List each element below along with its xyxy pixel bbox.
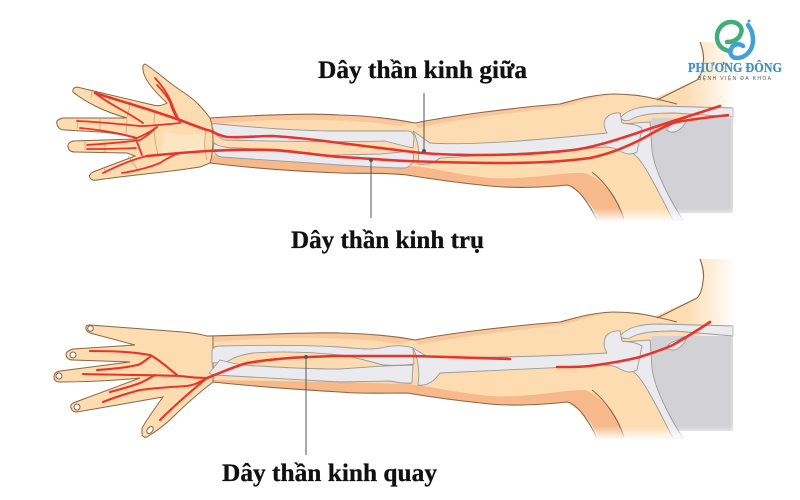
- white bottom fade, bottom arm: [590, 426, 740, 440]
- leader line: ulnar nerve: [369, 158, 373, 218]
- leader line: median nerve: [422, 93, 426, 153]
- ulna and radius, top: [212, 124, 414, 148]
- arm skin, bottom: [213, 312, 700, 440]
- bottom arm: radial nerve: [54, 259, 740, 440]
- radial nerve main, bottom: [207, 322, 710, 378]
- grey chest panel, top: [648, 118, 733, 213]
- hand, top: [57, 64, 213, 180]
- arm skin, top: [210, 94, 700, 222]
- ulna and radius, bottom: [212, 345, 414, 365]
- collarbone and scapula, bottom: [620, 324, 733, 339]
- label: radial nerve: Dây thần kinh quay: [222, 460, 438, 487]
- hand nerve branches, top: [77, 78, 180, 173]
- leader line: radial nerve: [304, 355, 308, 455]
- right fade, top arm: [730, 95, 740, 220]
- torso and neck, bottom: [650, 259, 740, 343]
- hand creases, top: [77, 91, 207, 174]
- hand, bottom: [54, 325, 213, 437]
- humerus, bottom: [413, 331, 642, 385]
- logo name: PHƯƠNG ĐÔNG: [688, 59, 782, 76]
- logo mark: [717, 20, 753, 58]
- palm shading, top: [160, 131, 205, 159]
- median nerve, top: [95, 93, 728, 163]
- label: ulnar nerve: Dây thần kinh trụ: [291, 227, 484, 254]
- radial nerve branches, bottom: [83, 351, 207, 420]
- torso and neck, top: [650, 42, 740, 125]
- grey chest panel, bottom: [648, 336, 733, 431]
- white bottom fade, top arm: [590, 208, 740, 222]
- collarbone and scapula, top: [620, 106, 733, 121]
- arm outline, top: [210, 42, 704, 220]
- arm outline, bottom: [207, 259, 704, 438]
- top arm: median and ulnar nerves: [57, 42, 740, 222]
- forearm and armpit shading, bottom: [213, 380, 625, 440]
- forearm and armpit shading, top: [210, 155, 625, 222]
- logo subtitle: BỆNH VIỆN ĐA KHOA: [698, 74, 772, 82]
- logo: Phuong Dong hospital: [688, 20, 782, 82]
- fingernails, bottom: [56, 326, 155, 435]
- humerus, top: [413, 113, 642, 164]
- label: median nerve: Dây thần kinh giữa: [318, 57, 528, 84]
- right fade, bottom arm: [730, 315, 740, 440]
